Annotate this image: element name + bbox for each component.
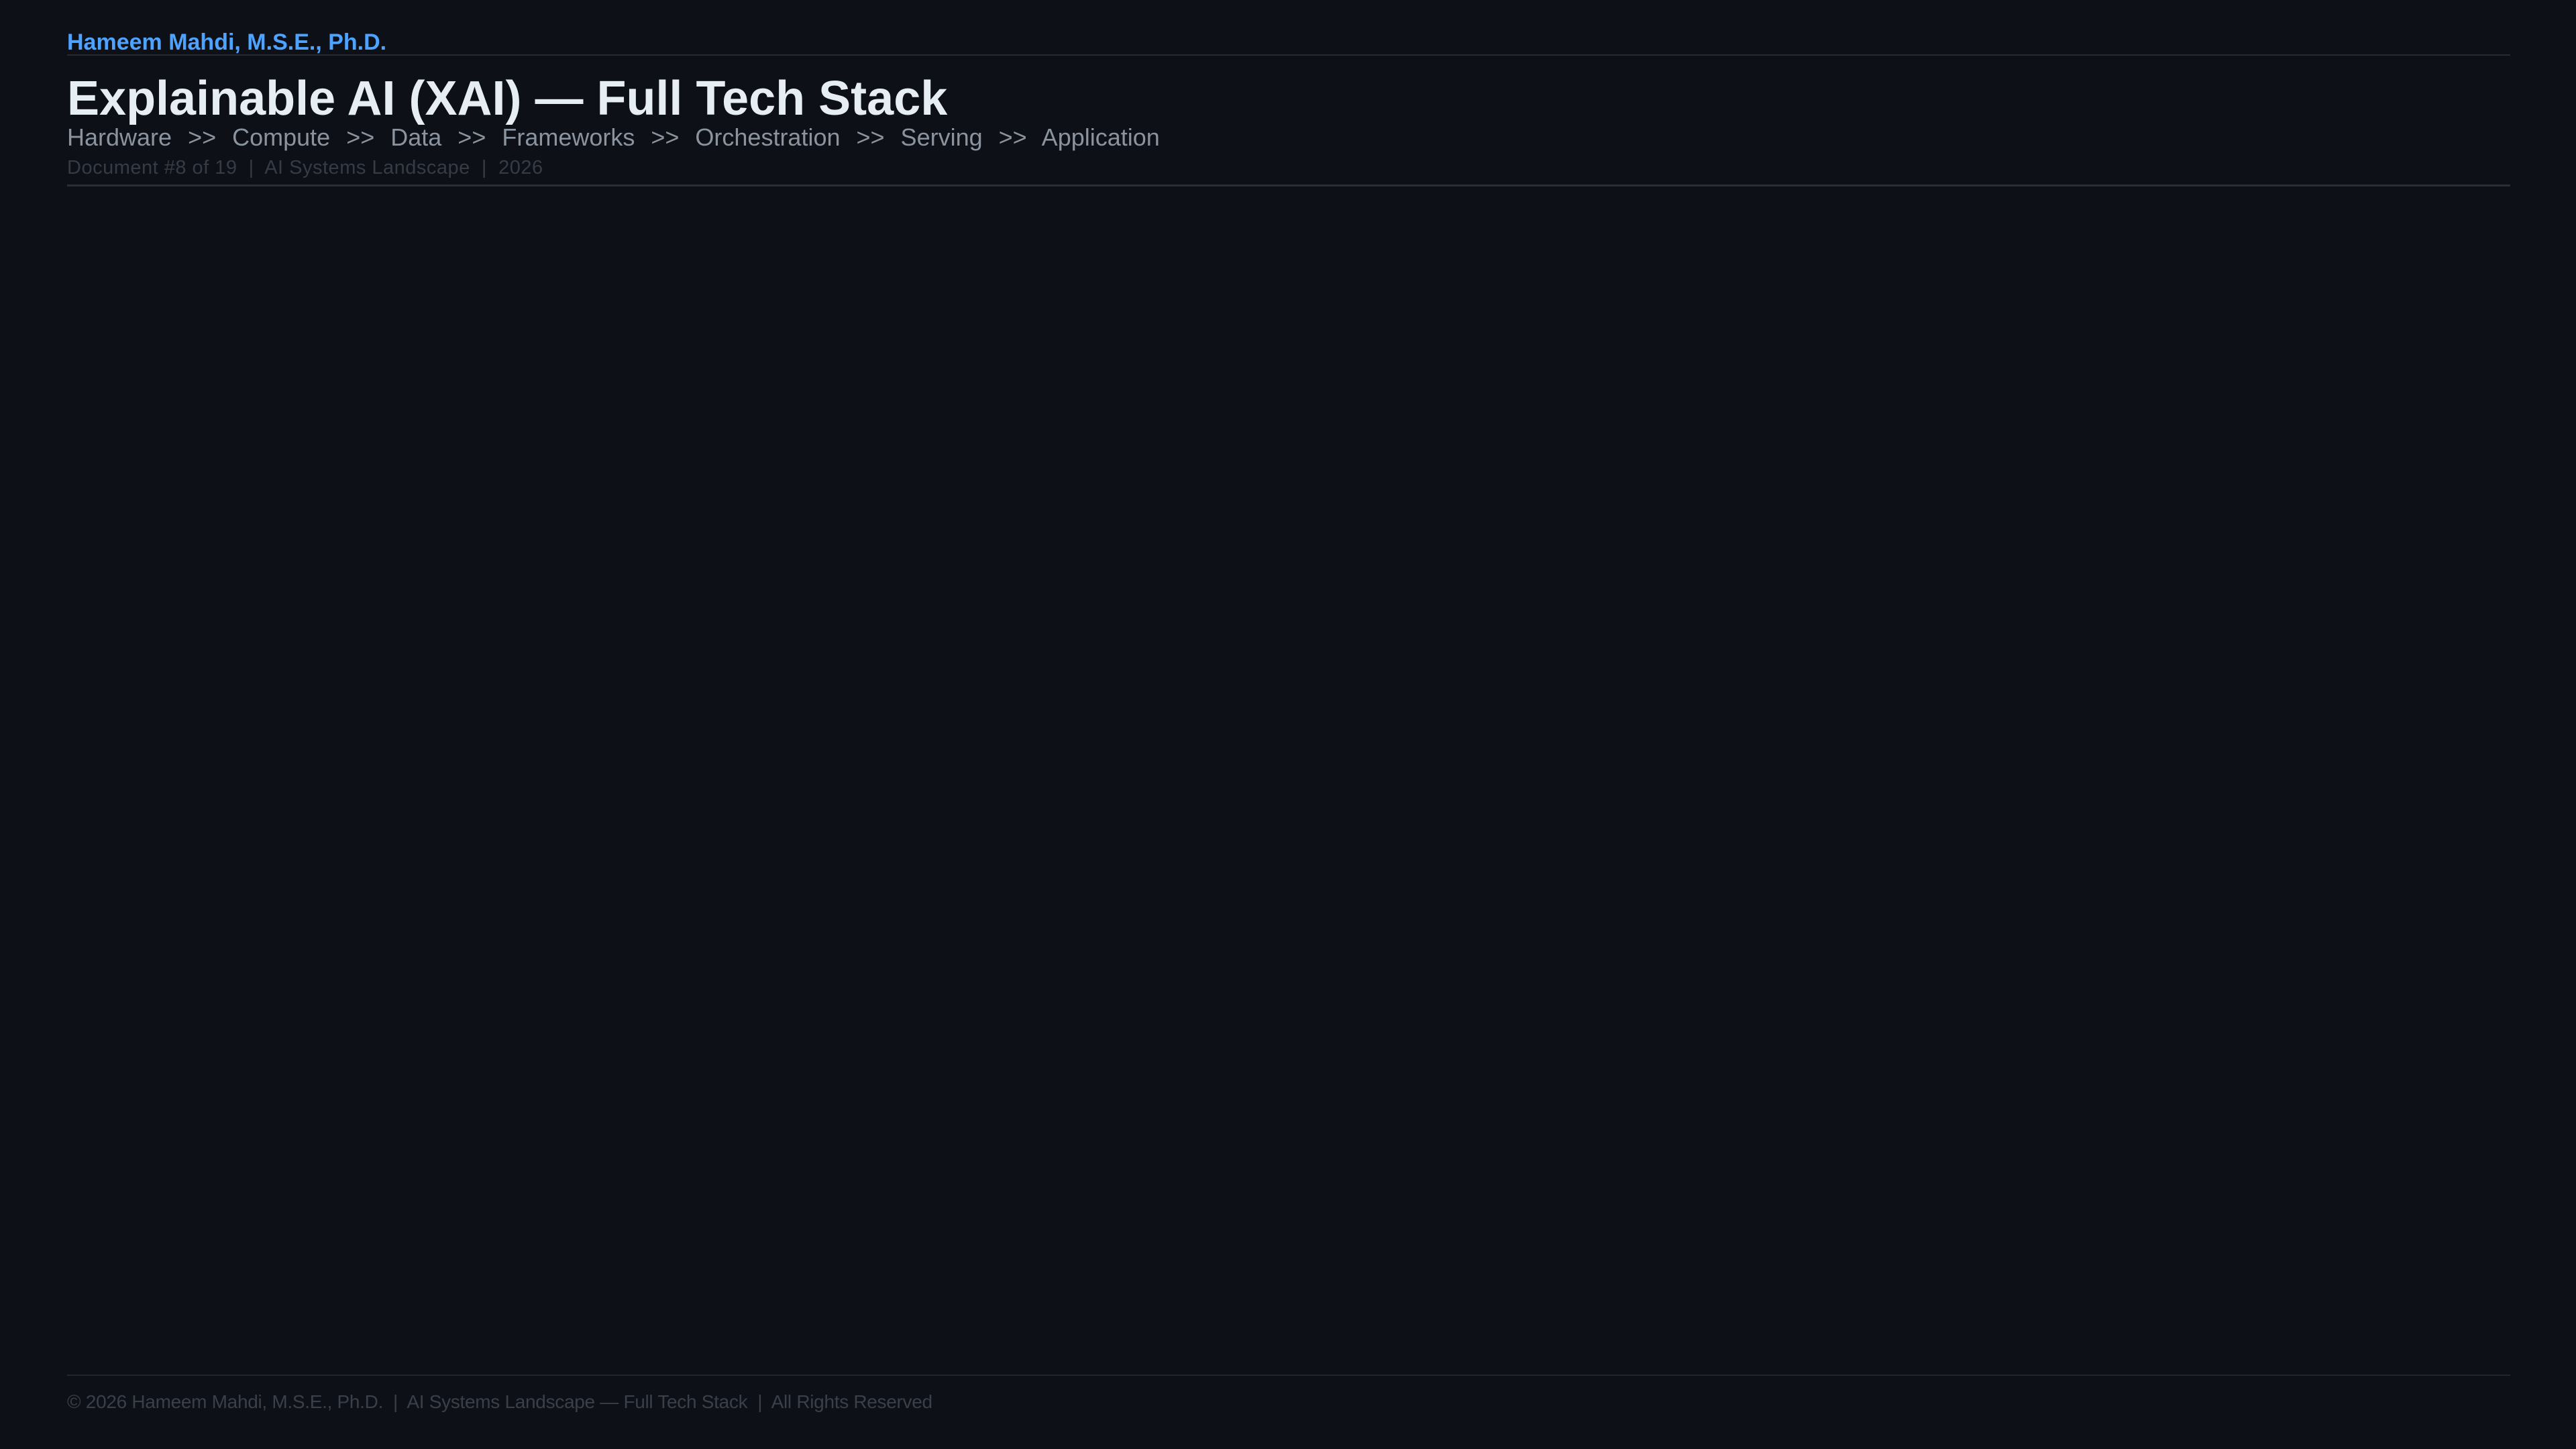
footer: © 2026 Hameem Mahdi, M.S.E., Ph.D. | AI Systems Landscape — Full Tech Stack | All Rights Reserved (67, 1391, 932, 1412)
breadcrumb: stack layers: Hardware >> Compute >> Data >> Frameworks >> Orchestration >> Serving >> Application (67, 123, 1160, 151)
document meta: Document #8 of 19 | AI Systems Landscape | 2026 (67, 157, 543, 178)
title: Explainable AI (XAI) — Full Tech Stack (67, 72, 947, 125)
author name: Hameem Mahdi, M.S.E., Ph.D. (67, 30, 386, 55)
